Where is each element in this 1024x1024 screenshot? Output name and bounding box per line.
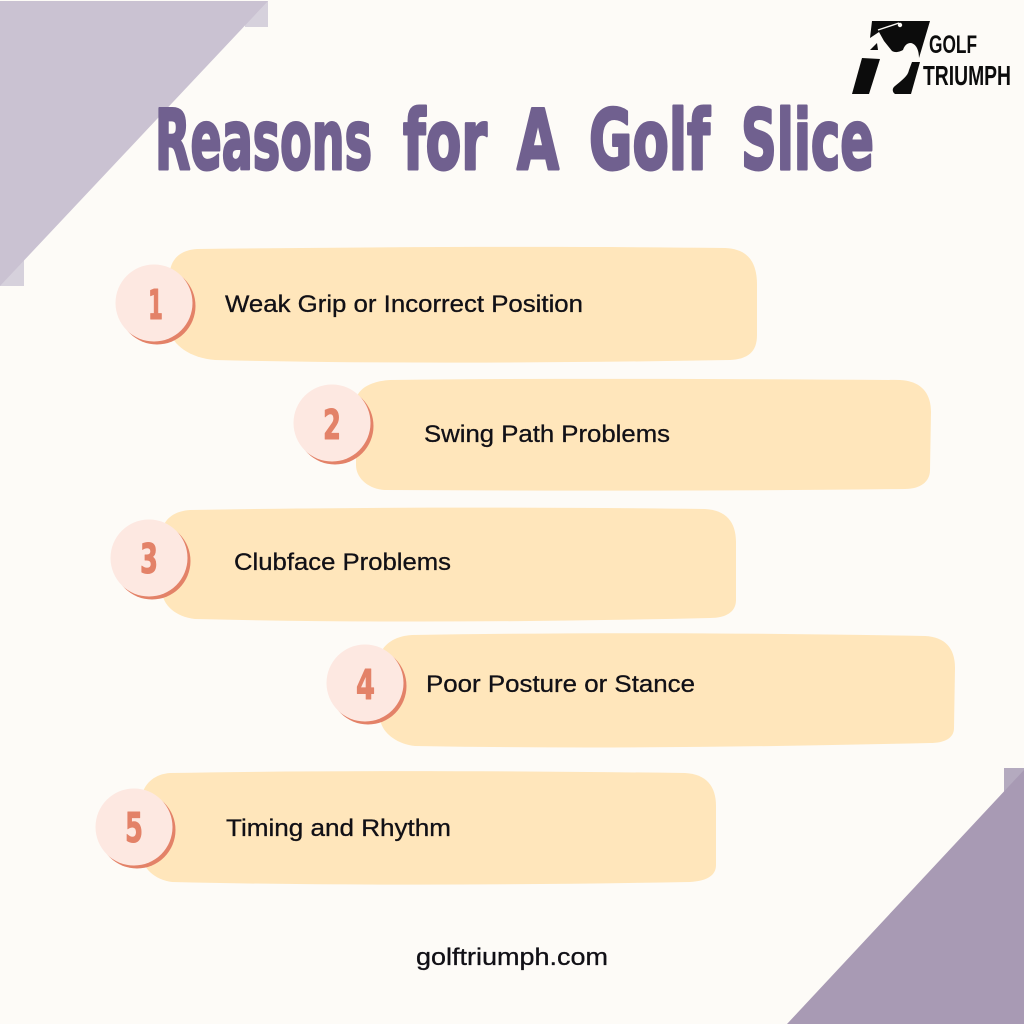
logo lower left block (852, 58, 880, 94)
title: A (517, 92, 559, 189)
golf club head (898, 23, 902, 27)
title (155, 92, 874, 189)
number badge 4: 4 (356, 661, 375, 709)
panel: reason 5 (96, 771, 716, 885)
logo wordmark (923, 31, 1011, 91)
logo lower right block (893, 62, 920, 94)
number badge 2: 2 (323, 401, 341, 449)
reason 5 label: Timing and Rhythm (226, 815, 451, 842)
number badge 5 (96, 788, 176, 868)
panel: reason 3 (110, 508, 736, 622)
corner triangle: top left (0, 1, 268, 286)
golfer arm gap (870, 43, 878, 50)
title: for (403, 92, 487, 189)
number badge 2 (294, 384, 374, 464)
logo: Golf Triumph (852, 21, 1011, 94)
number badge 3: 3 (140, 535, 158, 583)
reason 4 label: Poor Posture or Stance (426, 671, 695, 698)
reason 2 label: Swing Path Problems (424, 421, 670, 448)
panel: reason 4 (326, 633, 955, 747)
number badge 3 (110, 520, 190, 600)
panel: reason 2 (294, 379, 931, 491)
number badge 4 (326, 644, 406, 724)
reason 3 label: Clubface Problems (234, 549, 451, 576)
number badge 1: 1 (148, 281, 163, 329)
panel: reason 1 (116, 247, 757, 363)
title: Slice (741, 92, 874, 189)
logo upper block (870, 21, 930, 58)
title: Golf (589, 92, 711, 189)
reason 1 label: Weak Grip or Incorrect Position (225, 291, 583, 318)
number badge 5: 5 (125, 804, 143, 852)
title: Reasons (155, 92, 372, 189)
website footer: golftriumph.com (416, 944, 608, 971)
corner triangle: bottom right (787, 768, 1024, 1024)
logo wordmark: GOLF (929, 31, 977, 59)
golf club shaft (878, 23, 899, 30)
number badge 1 (116, 264, 196, 344)
